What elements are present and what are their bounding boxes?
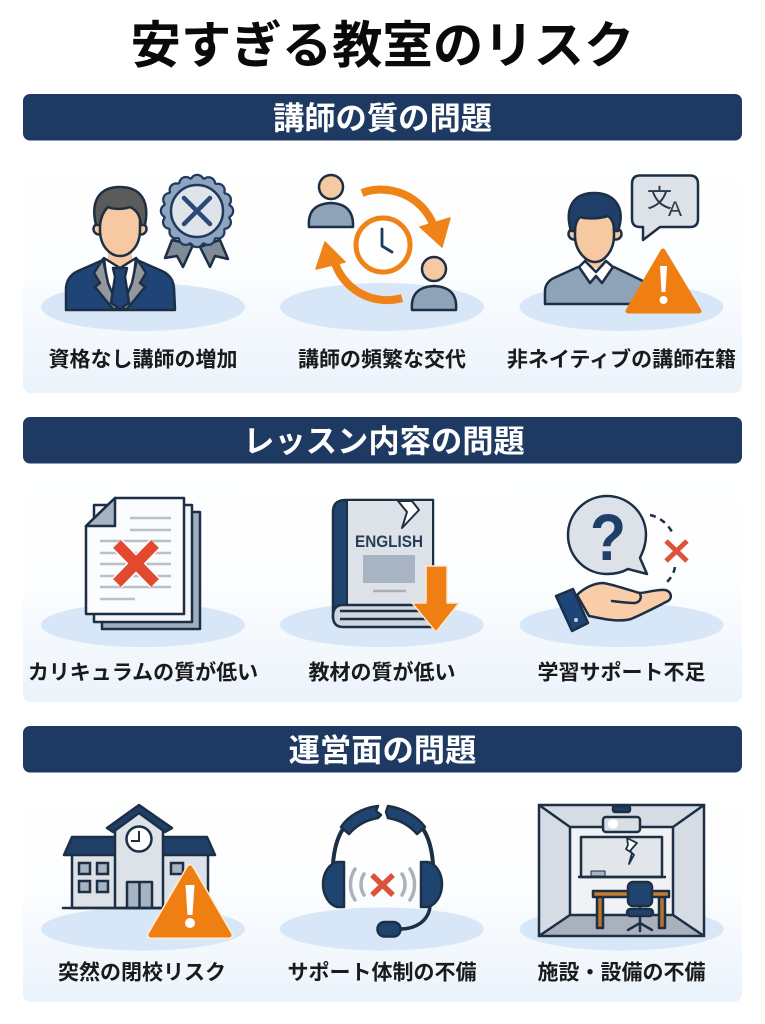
label: カリキュラムの質が低い	[28, 660, 258, 684]
label: 資格なし講師の増加	[48, 348, 238, 372]
icon: 閉校	[41, 805, 245, 950]
icon: 教材: ENGLISH	[355, 533, 423, 551]
icon: 非ネイティブ講師	[520, 176, 724, 331]
label: 非ネイティブの講師在籍	[507, 348, 736, 372]
heading: 講師の質の問題: 講師の質の問題	[273, 101, 492, 136]
label: 施設・設備の不備	[538, 962, 706, 984]
label: サポート体制の不備	[288, 962, 476, 984]
icon: ヘッドセット	[280, 806, 484, 950]
panel: レッスン内容の問題	[23, 417, 742, 702]
label: 教材の質が低い	[308, 660, 456, 684]
panel: 講師の質の問題	[23, 94, 742, 393]
title: 安すぎる教室のリスク	[131, 17, 634, 74]
icon: カリキュラム	[41, 498, 245, 647]
icon: 非ネイティブ講師: A	[668, 198, 682, 221]
icon: 頻繁な交代	[280, 175, 484, 331]
panel: 運営面の問題	[23, 726, 742, 1002]
icon: 資格なし講師	[41, 179, 245, 331]
icon: 非ネイティブ講師: 文	[647, 185, 672, 213]
heading: レッスン内容の問題	[23, 417, 742, 464]
heading: 運営面の問題	[23, 726, 742, 772]
icon: 教材	[280, 500, 484, 647]
label: 学習サポート不足	[538, 662, 706, 684]
heading: 運営面の問題: 運営面の問題	[289, 733, 476, 768]
heading: レッスン内容の問題: レッスン内容の問題	[243, 424, 525, 459]
icon: 施設	[520, 805, 724, 950]
icon: 学習サポート: ?	[590, 500, 626, 574]
label: 講師の頻繁な交代	[298, 348, 466, 372]
heading: 講師の質の問題	[23, 94, 742, 140]
label: 突然の閉校リスク	[58, 960, 226, 984]
icon: 学習サポート	[520, 496, 724, 647]
